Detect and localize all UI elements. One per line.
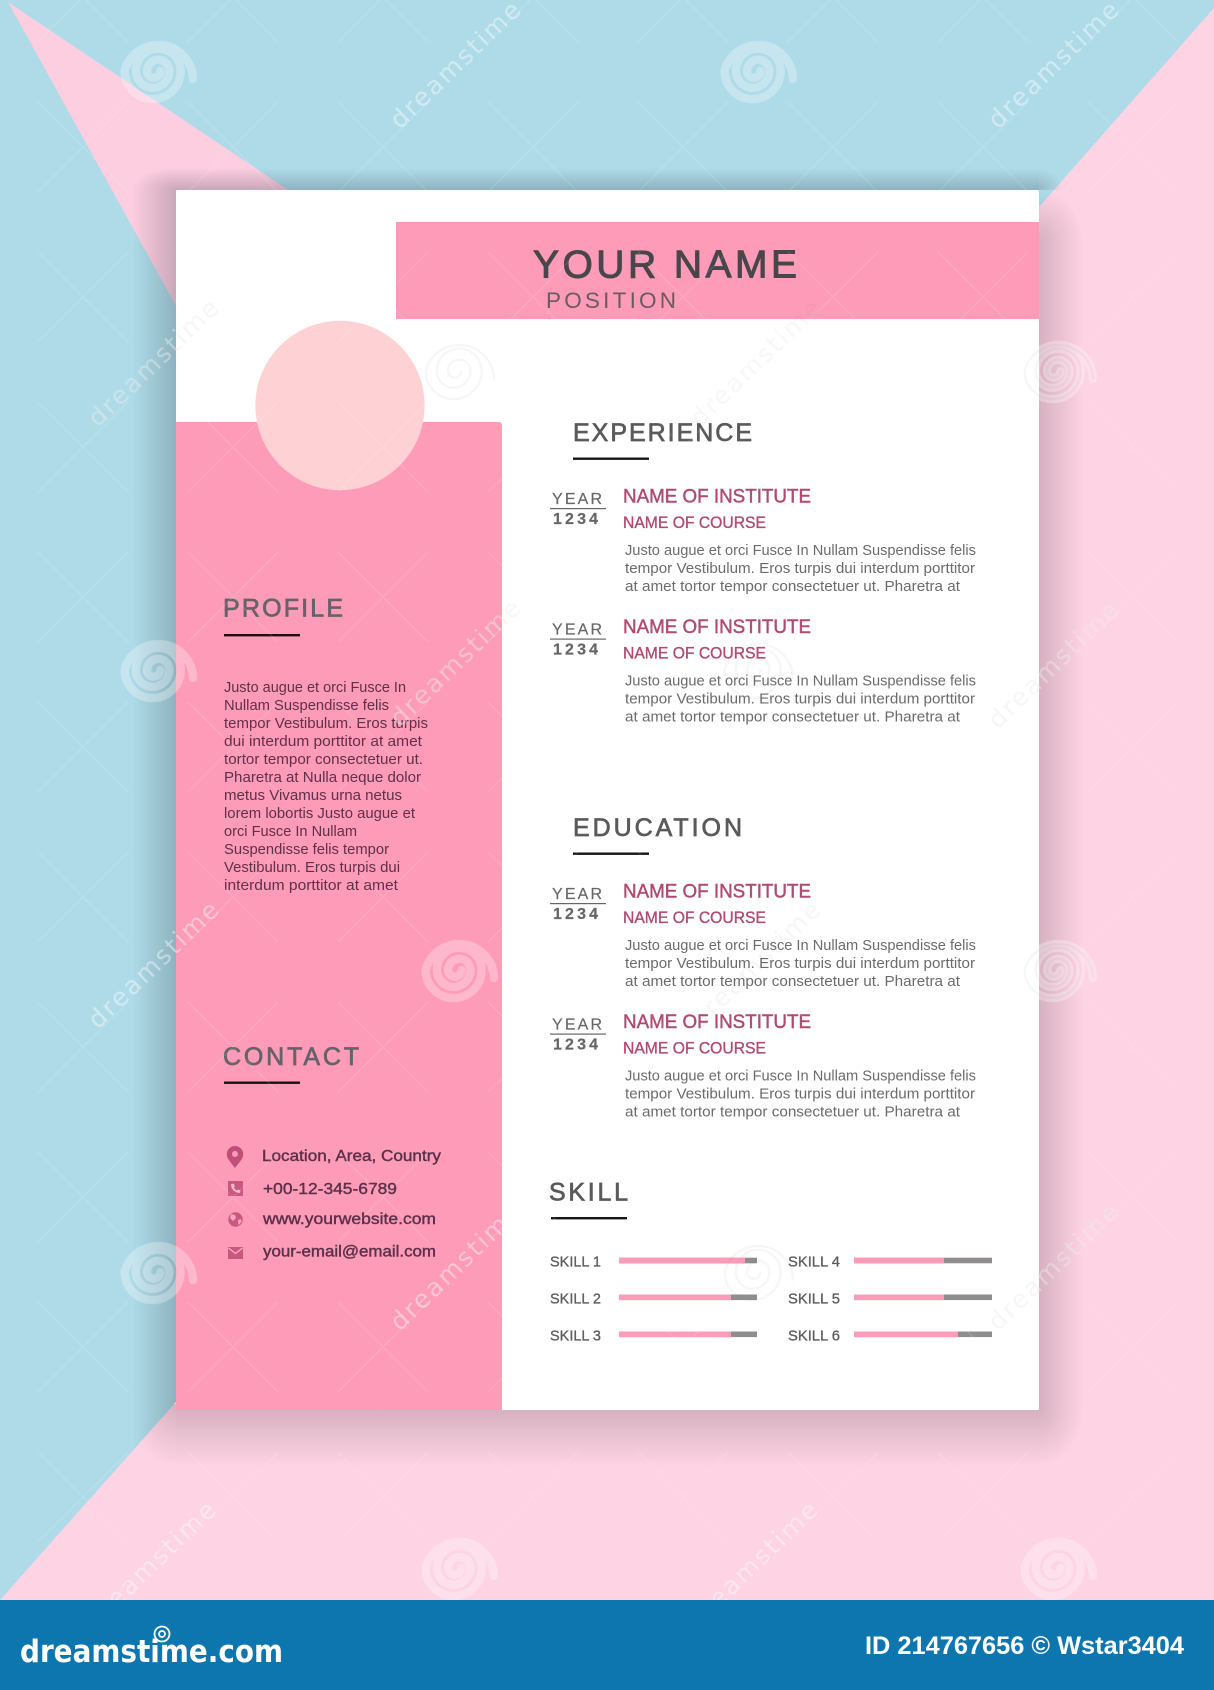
panel: education bbox=[550, 814, 976, 1120]
watermark overlay: dreamstime bbox=[681, 1495, 823, 1634]
education entry 2: Justo augue et orci Fusce In Nullam Suspendisse felis bbox=[625, 1068, 976, 1084]
experience entry 2: tempor Vestibulum. Eros turpis dui interdum porttitor bbox=[625, 692, 975, 708]
profile paragraph: Suspendisse felis tempor bbox=[224, 842, 389, 858]
profile paragraph: Pharetra at Nulla neque dolor bbox=[224, 770, 421, 786]
footer image id: ID 214767656 © Wstar3404 bbox=[865, 1632, 1184, 1660]
experience entry 2 bbox=[550, 617, 976, 726]
icon: location pin bbox=[227, 1146, 243, 1168]
skill 4 bar: SKILL 4 bbox=[788, 1254, 840, 1271]
experience entry 2: YEAR bbox=[552, 622, 602, 638]
experience entry 1 bbox=[550, 487, 976, 595]
profile paragraph: Justo augue et orci Fusce In bbox=[224, 680, 406, 696]
profile paragraph: tempor Vestibulum. Eros turpis bbox=[224, 716, 428, 732]
profile paragraph: orci Fusce In Nullam bbox=[224, 824, 357, 840]
experience entry 2: NAME OF COURSE bbox=[623, 644, 766, 662]
experience entry 1: NAME OF COURSE bbox=[623, 514, 766, 532]
heading: contact: CONTACT bbox=[223, 1043, 359, 1071]
watermark overlay: dreamstime bbox=[982, 595, 1124, 734]
heading: skill: SKILL bbox=[549, 1179, 628, 1207]
education entry 2 bbox=[550, 1012, 976, 1120]
panel: sidebar bbox=[176, 422, 502, 1410]
education entry 1: YEAR bbox=[552, 886, 602, 903]
experience entry 1: at amet tortor tempor consectetuer ut. Pharetra at bbox=[625, 579, 960, 595]
skill 5 bar bbox=[788, 1290, 992, 1308]
skill 2 bar: SKILL 2 bbox=[550, 1290, 601, 1308]
experience entry 2: at amet tortor tempor consectetuer ut. Pharetra at bbox=[625, 710, 960, 726]
experience entry 1: NAME OF INSTITUTE bbox=[623, 487, 811, 508]
resume card bbox=[176, 190, 1039, 1410]
profile paragraph: tortor tempor consectetuer ut. bbox=[224, 752, 423, 768]
experience entry 2: 1234 bbox=[553, 642, 598, 658]
skill 3 bar bbox=[550, 1328, 757, 1344]
watermark overlay: dreamstime bbox=[982, 1197, 1124, 1336]
profile paragraph: lorem lobortis Justo augue et bbox=[224, 806, 415, 822]
skill 6 bar bbox=[788, 1328, 992, 1344]
contact: website text: www.yourwebsite.com bbox=[262, 1211, 436, 1228]
icon: phone bbox=[228, 1181, 243, 1196]
education entry 2: YEAR bbox=[552, 1016, 602, 1034]
skill 6 bar: SKILL 6 bbox=[788, 1328, 840, 1344]
watermark overlay: dreamstime bbox=[79, 1495, 221, 1634]
panel: profile bbox=[223, 595, 428, 894]
profile paragraph: metus Vivamus urna netus bbox=[224, 788, 402, 804]
skill 5 bar: SKILL 5 bbox=[788, 1290, 840, 1308]
heading: education: EDUCATION bbox=[573, 814, 742, 842]
background: top-left pink triangle bbox=[8, 2, 288, 306]
footer banner bbox=[0, 1600, 1214, 1690]
title: your name: YOUR NAME bbox=[533, 244, 797, 286]
skill 1 bar bbox=[550, 1254, 757, 1271]
photo placeholder circle bbox=[255, 321, 425, 490]
education entry 1: 1234 bbox=[553, 906, 598, 923]
panel: skills bbox=[549, 1179, 992, 1344]
card drop shadow bbox=[130, 168, 1083, 1466]
contact: phone text: +00-12-345-6789 bbox=[263, 1181, 397, 1198]
experience entry 1: Justo augue et orci Fusce In Nullam Suspendisse felis bbox=[625, 543, 976, 559]
contact: location text: Location, Area, Country bbox=[262, 1148, 441, 1165]
education entry 2: at amet tortor tempor consectetuer ut. Pharetra at bbox=[625, 1104, 960, 1120]
skill 4 bar bbox=[788, 1254, 992, 1271]
education entry 2: NAME OF INSTITUTE bbox=[623, 1012, 811, 1033]
panel: experience bbox=[550, 419, 976, 726]
experience entry 2: Justo augue et orci Fusce In Nullam Suspendisse felis bbox=[625, 674, 976, 690]
education entry 1: tempor Vestibulum. Eros turpis dui interdum porttitor bbox=[625, 956, 975, 972]
experience entry 1: tempor Vestibulum. Eros turpis dui interdum porttitor bbox=[625, 561, 975, 577]
footer logo: dreamstime.com: dreamstime.com bbox=[20, 1634, 283, 1670]
skill 2 bar bbox=[550, 1290, 757, 1308]
icon: logo spiral bbox=[154, 1626, 170, 1642]
watermark overlay: dreamstime bbox=[82, 895, 224, 1034]
education entry 2: 1234 bbox=[553, 1036, 598, 1054]
watermark overlay: dreamstime bbox=[384, 1197, 526, 1336]
education entry 1: Justo augue et orci Fusce In Nullam Suspendisse felis bbox=[625, 938, 976, 954]
experience entry 1: YEAR bbox=[552, 491, 602, 508]
skill 3 bar: SKILL 3 bbox=[550, 1328, 601, 1344]
heading: experience: EXPERIENCE bbox=[573, 419, 752, 447]
education entry 2: NAME OF COURSE bbox=[623, 1040, 766, 1058]
watermark overlay: dreamstime bbox=[384, 593, 526, 732]
heading: profile: PROFILE bbox=[223, 595, 343, 623]
watermark overlay: dreamstime bbox=[82, 293, 224, 432]
profile paragraph: dui interdum porttitor at amet bbox=[224, 734, 422, 750]
education entry 1: NAME OF INSTITUTE bbox=[623, 882, 811, 903]
education entry 1: at amet tortor tempor consectetuer ut. Pharetra at bbox=[625, 974, 960, 990]
profile paragraph: interdum porttitor at amet bbox=[224, 878, 398, 894]
panel: contact bbox=[223, 1043, 441, 1260]
subtitle: position: POSITION bbox=[546, 288, 676, 313]
education entry 1 bbox=[550, 882, 976, 990]
watermark overlay: dreamstime bbox=[684, 293, 826, 432]
panel: name header band bbox=[396, 222, 1039, 319]
contact: email text: your-email@email.com bbox=[263, 1244, 436, 1260]
skill 1 bar: SKILL 1 bbox=[550, 1254, 601, 1271]
profile paragraph: Nullam Suspendisse felis bbox=[224, 698, 389, 714]
watermark overlay: dreamstime bbox=[982, 1197, 1124, 1336]
experience entry 1: 1234 bbox=[553, 511, 598, 528]
watermark overlay: dreamstime bbox=[684, 895, 826, 1034]
education entry 2: tempor Vestibulum. Eros turpis dui interdum porttitor bbox=[625, 1086, 975, 1102]
experience entry 2: NAME OF INSTITUTE bbox=[623, 617, 811, 638]
watermark overlay: dreamstime bbox=[82, 293, 224, 432]
icon: envelope bbox=[228, 1247, 243, 1259]
education entry 1: NAME OF COURSE bbox=[623, 909, 766, 927]
watermark overlay: dreamstime bbox=[384, 593, 526, 732]
watermark overlay: dreamstime bbox=[982, 595, 1124, 734]
icon: globe bbox=[228, 1212, 243, 1227]
profile paragraph: Vestibulum. Eros turpis dui bbox=[224, 860, 400, 876]
profile paragraph bbox=[224, 680, 428, 894]
